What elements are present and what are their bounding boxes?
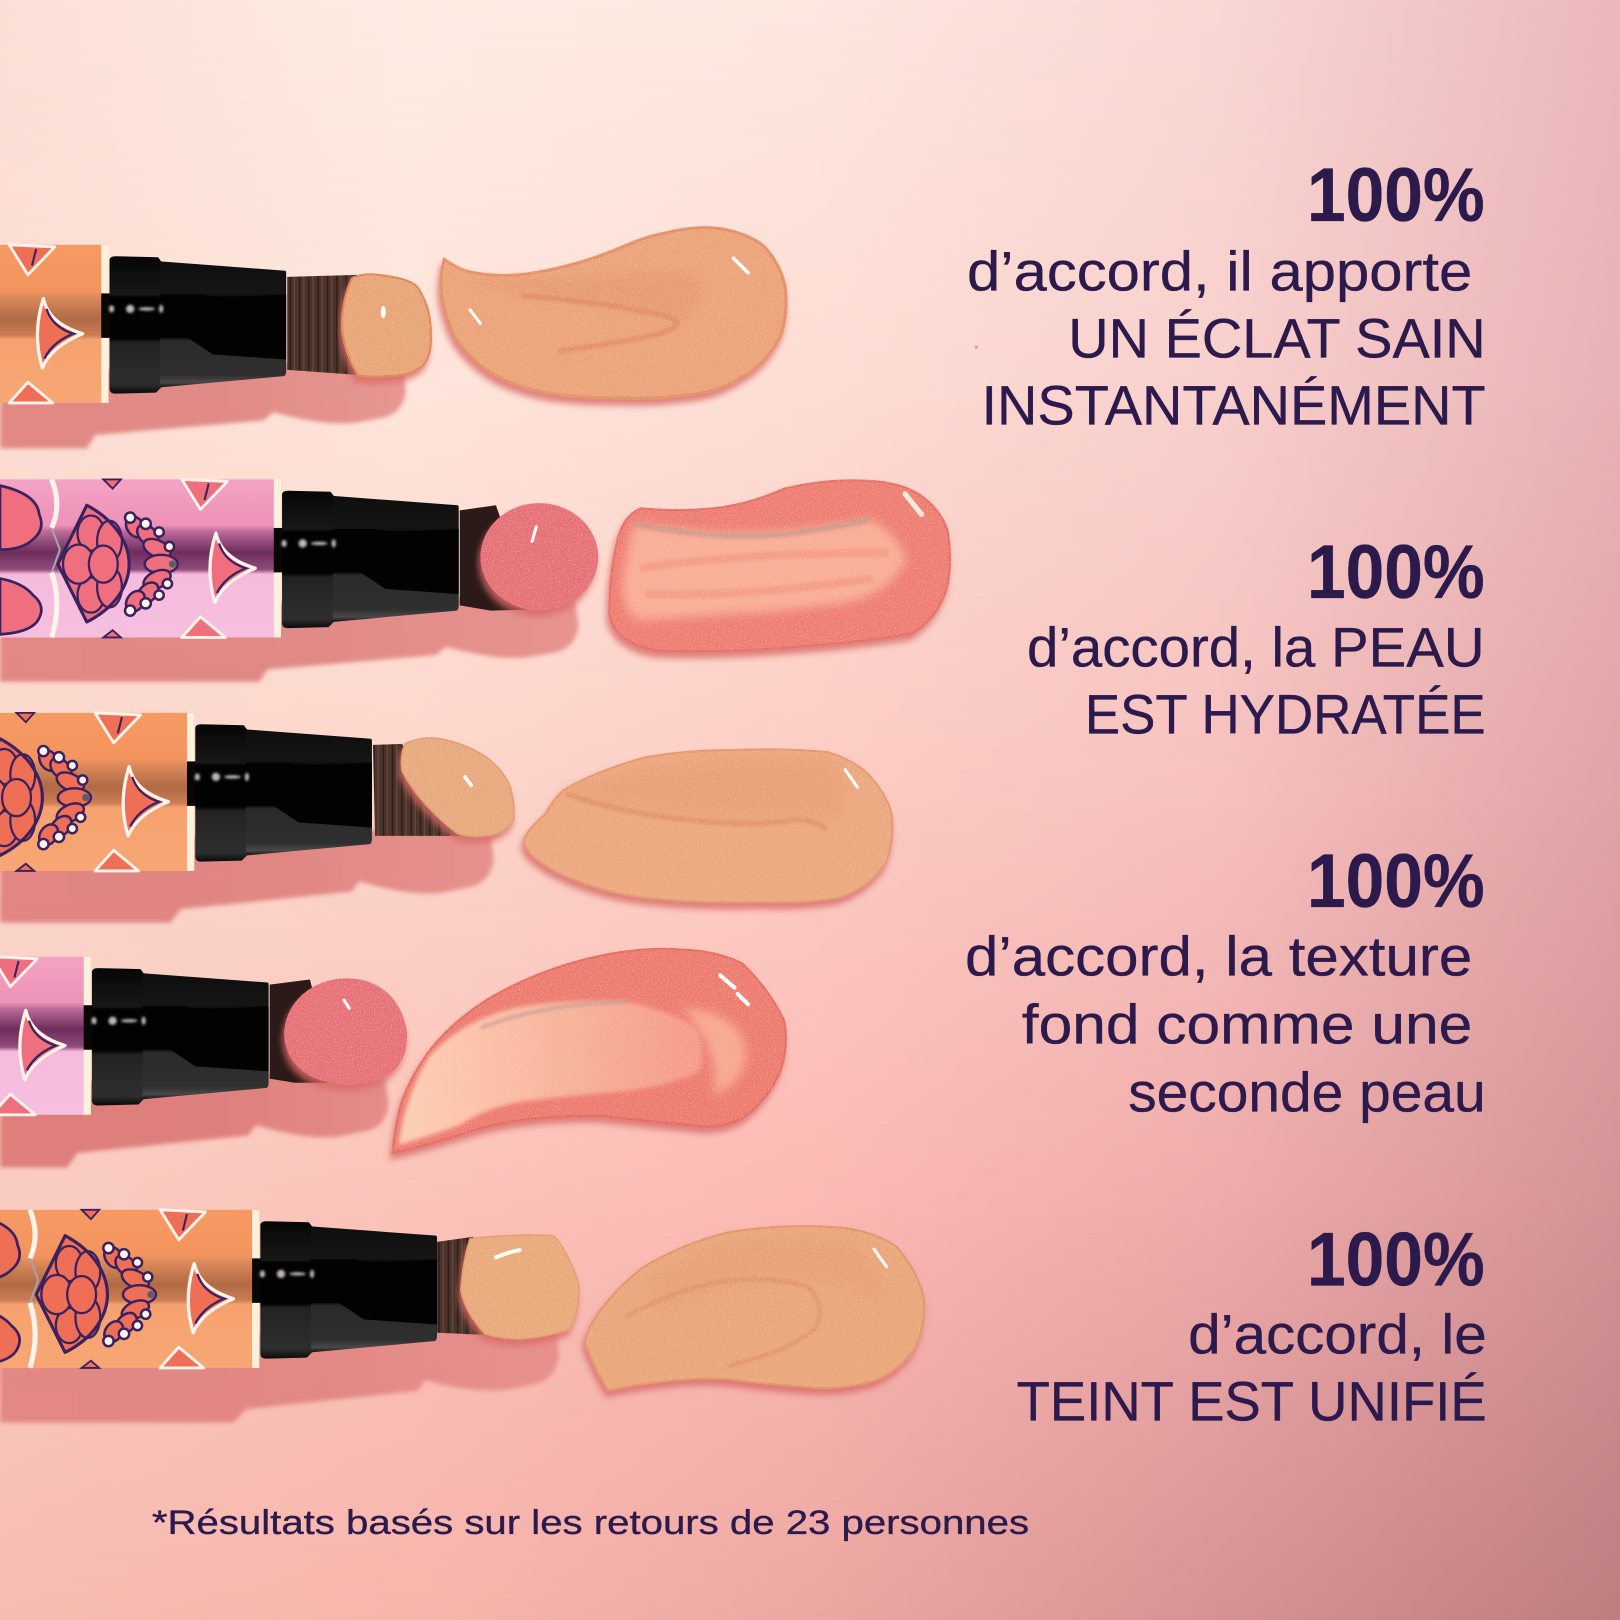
stat description: TEINT EST UNIFIÉ [1017,1370,1487,1433]
product 3: orange stick with swatch [0,713,892,923]
stat description [965,924,1486,1124]
stat description: d’accord, la PEAU [1027,615,1485,678]
brush 5 [437,1237,486,1335]
stat description: d’accord, le [1188,1302,1487,1365]
cast shadow 2 [0,593,579,682]
cast shadow 1 [0,359,406,448]
stat block 1 [967,153,1486,437]
sponge tip 1 [342,274,431,377]
stat description [1027,615,1486,746]
tube 5 [0,1210,437,1368]
swatch 3 [524,749,892,902]
stat description [1017,1302,1487,1433]
cast shadow 3 [0,827,494,923]
stat description: EST HYDRATÉE [1085,683,1486,746]
stat block 3 [965,839,1486,1124]
stat block 2 [1027,530,1486,746]
brush 1 [287,275,360,375]
tube 2 [0,479,459,637]
swatch 1 [441,228,786,398]
brush 2 [460,505,532,611]
sponge tip 5 [461,1235,579,1339]
stat number: 100% [1307,530,1485,615]
sponge tip 3 [401,738,514,837]
tube 3 [0,713,372,871]
product 5: orange stick with swatch [0,1210,924,1423]
footnote: *Résultats basés sur les retours de 23 personnes [152,1504,1029,1542]
sponge tip 4 [284,978,407,1085]
stat description: seconde peau [1128,1061,1486,1124]
stat description: UN ÉCLAT SAIN [1068,306,1486,369]
stat description: INSTANTANÉMENT [982,374,1486,437]
stat description [967,239,1486,437]
product 4: pink stick with swatch [0,949,786,1167]
brush 4 [270,979,336,1083]
product 1: orange stick with swatch [0,228,786,448]
swatch 5 [585,1226,924,1391]
stat block 4 [1017,1217,1487,1433]
stat description: d’accord, il apporte [967,239,1472,302]
swatch 2 [609,480,950,651]
stat number: 100% [1307,1217,1485,1302]
product 2: pink stick with swatch [0,479,950,682]
swatch 4 [393,949,786,1153]
brush 3 [373,744,464,836]
stat description: d’accord, la texture [965,924,1472,987]
stat description: fond comme une [1022,992,1472,1055]
tube 1 [0,245,286,403]
sponge tip 2 [480,503,598,611]
cast shadow 5 [0,1323,559,1423]
stat number: 100% [1307,839,1485,924]
stat number: 100% [1307,153,1485,238]
cast shadow 4 [0,1070,388,1167]
tube 4 [0,957,269,1115]
